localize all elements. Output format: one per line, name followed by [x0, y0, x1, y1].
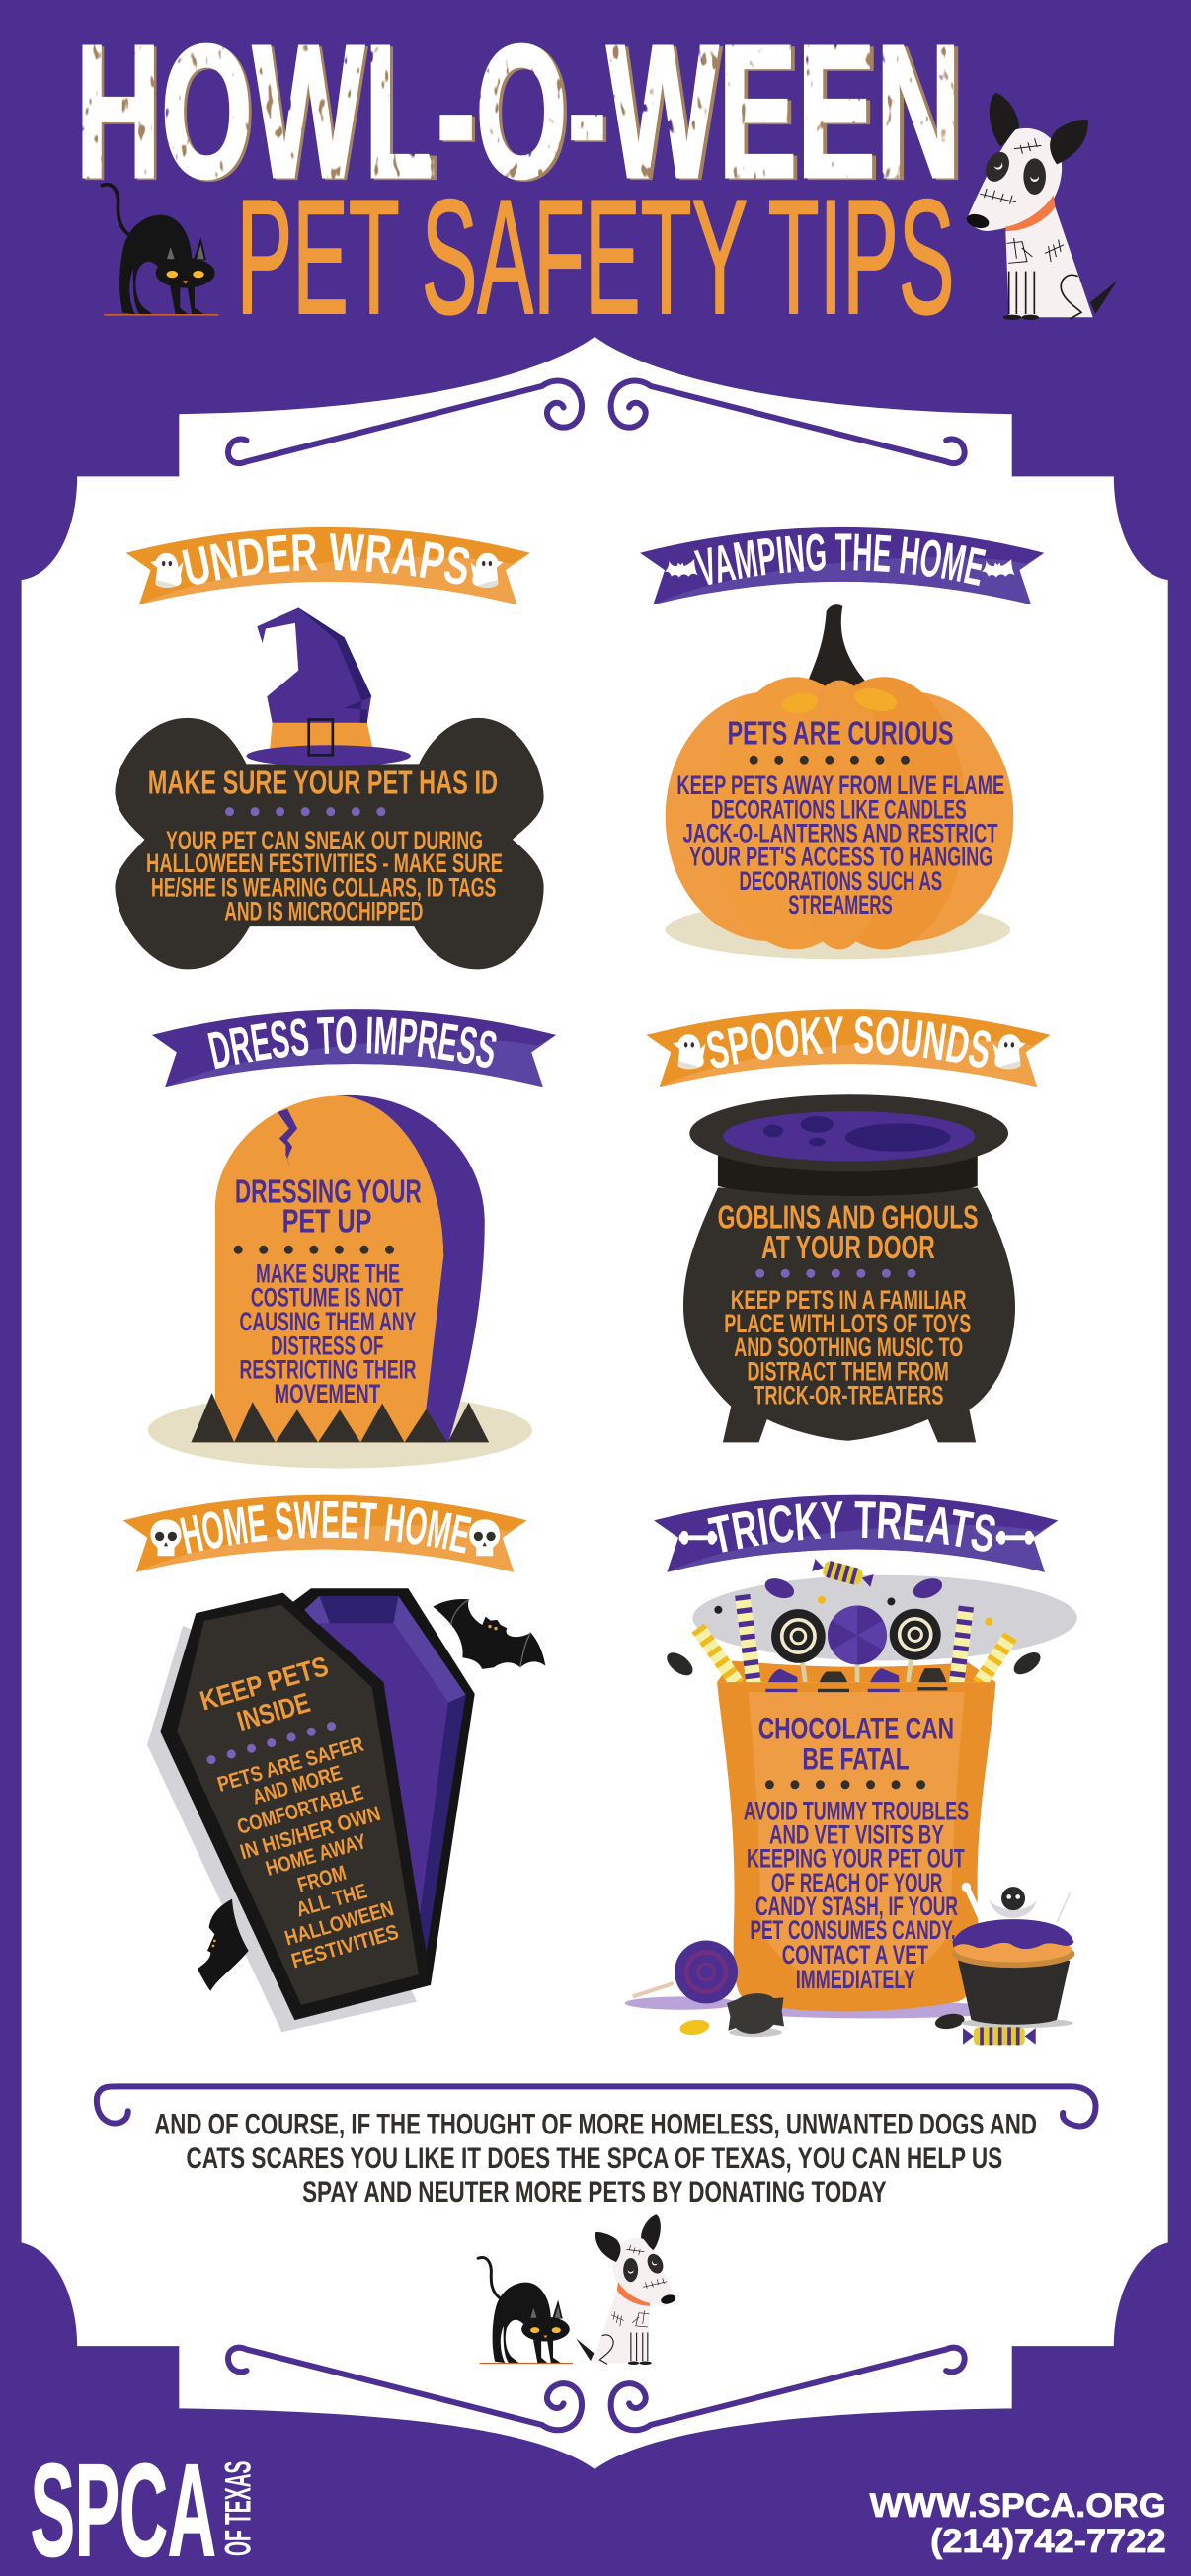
- pumpkin body: [666, 677, 1013, 949]
- ground shadow: [666, 900, 1010, 959]
- banner: Tricky Treats: [654, 1495, 1059, 1572]
- pumpkin stem: [808, 604, 867, 693]
- heading: GOBLINS AND GHOULS: [718, 1199, 979, 1236]
- icon: black cat top: [102, 185, 219, 316]
- banner: Under Wraps: UNDER WRAPS: [182, 533, 470, 585]
- icon: wrapped candies in bag: [765, 1668, 947, 1692]
- icon: stitched dog top: [965, 93, 1118, 320]
- bag heading: CHOCOLATE CAN: [758, 1711, 954, 1745]
- coffin body text: ALL THE: [293, 1879, 369, 1922]
- cauldron rim: [689, 1094, 1008, 1171]
- footer ornament bracket: [97, 2086, 1096, 2126]
- body text: DISTRESS OF: [271, 1331, 383, 1361]
- panel: candy bag: [625, 1557, 1077, 2045]
- icon: top wrapped candy: [812, 1557, 874, 1589]
- icon: bat lower: [198, 1899, 249, 1991]
- coffin body text: HALLOWEEN: [282, 1896, 396, 1950]
- dots: [769, 1771, 946, 1798]
- bag body text: PET CONSUMES CANDY,: [750, 1915, 956, 1945]
- banner: Under Wraps: [126, 527, 530, 604]
- body text: YOUR PET'S ACCESS TO HANGING: [689, 843, 992, 872]
- body text: TRICK-OR-TREATERS: [754, 1381, 943, 1410]
- bag heading: BE FATAL: [802, 1741, 910, 1776]
- coffin body text: [215, 1732, 401, 1973]
- body text: AND SOOTHING MUSIC TO: [734, 1332, 963, 1362]
- banner: Spooky Sounds: SPOOKY SOUNDS: [707, 1016, 992, 1069]
- tombstone front: [215, 1095, 443, 1442]
- icon: witch hat: [247, 607, 411, 766]
- body text: PLACE WITH LOTS OF TOYS: [724, 1309, 971, 1338]
- dots: [238, 1248, 415, 1252]
- bag body text: CANDY STASH, IF YOUR: [755, 1892, 958, 1921]
- coffin body text: AND MORE: [250, 1761, 345, 1810]
- body text: MOVEMENT: [275, 1379, 380, 1409]
- bag body text: KEEPING YOUR PET OUT: [747, 1843, 965, 1873]
- body text: DECORATIONS LIKE CANDLES: [711, 794, 967, 824]
- icon: striped candy bottom: [963, 2027, 1036, 2045]
- heading: [235, 1173, 422, 1240]
- icon: yellow bean: [678, 2018, 710, 2037]
- icon: stitched dog bottom: [576, 2214, 676, 2365]
- heading: DRESSING YOUR: [235, 1173, 422, 1210]
- bag body text: [744, 1796, 969, 1994]
- closing message text: SPAY AND NEUTER MORE PETS BY DONATING TODAY: [302, 2176, 887, 2209]
- bottom ornament: [228, 2348, 965, 2430]
- body text: [146, 826, 503, 926]
- body text: AND IS MICROCHIPPED: [224, 896, 424, 926]
- gray backdrop: [692, 1575, 1077, 1660]
- coffin body text: HOME AWAY: [263, 1829, 369, 1881]
- icon: wrapped candy tops over bag: [765, 1687, 947, 1692]
- panel: ID tag bone: [115, 607, 544, 969]
- heading: AT YOUR DOOR: [761, 1230, 935, 1266]
- cauldron body: [683, 1188, 1015, 1442]
- heading: PET UP: [282, 1203, 371, 1240]
- body text: MAKE SURE THE: [256, 1258, 400, 1288]
- bag body text: OF REACH OF YOUR: [771, 1868, 942, 1897]
- panel: tombstone: [148, 1095, 532, 1468]
- body text: KEEP PETS IN A FAMILIAR: [731, 1285, 967, 1315]
- body text: HE/SHE IS WEARING COLLARS, ID TAGS: [151, 872, 496, 902]
- coffin body text: IN HIS/HER OWN: [237, 1802, 383, 1864]
- banner: Dress to Impress: DRESS TO IMPRESS: [207, 1016, 497, 1069]
- icon: cupcake: [952, 1883, 1074, 2028]
- bag back rim: [717, 1660, 995, 1682]
- coffin heading: KEEP PETS: [197, 1650, 332, 1717]
- body text: DISTRACT THEM FROM: [748, 1357, 949, 1387]
- coffin base: [260, 1588, 475, 1988]
- candy floor shadows: [625, 1996, 1010, 2018]
- body text: [240, 1258, 417, 1409]
- coffin lid: [160, 1593, 431, 2020]
- bag front: [717, 1682, 995, 2011]
- icon: bat upper: [433, 1599, 545, 1669]
- contact details: WWW.SPCA.ORG: [870, 2487, 1166, 2525]
- dots: [754, 758, 930, 763]
- bone shape: [115, 718, 544, 969]
- coffin body text: COMFORTABLE: [234, 1781, 366, 1839]
- panel: coffin: [147, 1588, 545, 2032]
- bag body text: AVOID TUMMY TROUBLES: [744, 1796, 969, 1825]
- body text: [724, 1285, 971, 1410]
- bag body text: CONTACT A VET: [782, 1940, 928, 1970]
- dots: [211, 1721, 352, 1760]
- body text: DECORATIONS SUCH AS: [740, 866, 942, 896]
- heading: MAKE SURE YOUR PET HAS ID: [148, 765, 498, 801]
- potion: [723, 1111, 975, 1162]
- dots: [230, 809, 406, 814]
- body text: COSTUME IS NOT: [251, 1283, 403, 1313]
- closing message text: [154, 2109, 1037, 2209]
- ground shadow: [148, 1393, 532, 1468]
- coffin body text: FROM: [295, 1861, 349, 1897]
- dots: [760, 1270, 936, 1276]
- coffin heading: [197, 1650, 332, 1736]
- heading: [718, 1199, 979, 1266]
- panel: pumpkin: [666, 604, 1013, 959]
- coffin heading: INSIDE: [234, 1687, 313, 1736]
- grass spikes: [191, 1393, 489, 1442]
- coffin body text: FESTIVITIES: [288, 1920, 401, 1973]
- heading: PETS ARE CURIOUS: [728, 715, 953, 752]
- logo: SPCA of Texas: [31, 2438, 259, 2576]
- body text: KEEP PETS AWAY FROM LIVE FLAME: [676, 770, 1004, 800]
- body text: STREAMERS: [788, 890, 893, 920]
- bag heading: [758, 1711, 954, 1776]
- white ornate frame panel: [22, 337, 1168, 2469]
- icon: lollipop sticks: [803, 1659, 911, 1692]
- banner: Vamping the Home: VAMPING THE HOME: [693, 533, 986, 586]
- coffin body text: PETS ARE SAFER: [215, 1732, 366, 1797]
- icon: black bean: [934, 2012, 966, 2031]
- body text: [676, 770, 1004, 920]
- bag body text: AND VET VISITS BY: [769, 1819, 944, 1849]
- logo: SPCA of Texas: OF TEXAS: [218, 2461, 259, 2556]
- body text: YOUR PET CAN SNEAK OUT DURING: [166, 826, 483, 855]
- contact details: (214)742-7722: [930, 2523, 1166, 2560]
- coffin shadow: [147, 1626, 417, 2032]
- cauldron neck: [718, 1150, 978, 1196]
- body text: JACK-O-LANTERNS AND RESTRICT: [682, 819, 998, 848]
- tombstone side: [337, 1095, 485, 1442]
- banner: Tricky Treats: TRICKY TREATS: [707, 1501, 995, 1553]
- icon: swirl lollipops: [771, 1605, 941, 1664]
- contact details: [870, 2487, 1166, 2560]
- top ornament: [228, 381, 965, 463]
- bag body text: IMMEDIATELY: [796, 1965, 915, 1994]
- body text: HALLOWEEN FESTIVITIES - MAKE SURE: [146, 848, 503, 878]
- crack: [278, 1109, 297, 1168]
- body text: RESTRICTING THEIR: [240, 1354, 417, 1384]
- icon: black cat bottom: [478, 2258, 573, 2364]
- icon: striped candy sticks: [698, 1595, 1010, 1685]
- icon: black wrapped candy: [727, 1993, 784, 2037]
- body text: CAUSING THEM ANY: [240, 1307, 417, 1336]
- bag highlight: [748, 1692, 965, 1985]
- icon: lollipop purple: [633, 1940, 738, 2003]
- panel: cauldron: [683, 1094, 1015, 1442]
- banner: Home Sweet Home: HOME SWEET HOME: [180, 1501, 472, 1554]
- icon: jelly beans: [663, 1574, 1044, 1680]
